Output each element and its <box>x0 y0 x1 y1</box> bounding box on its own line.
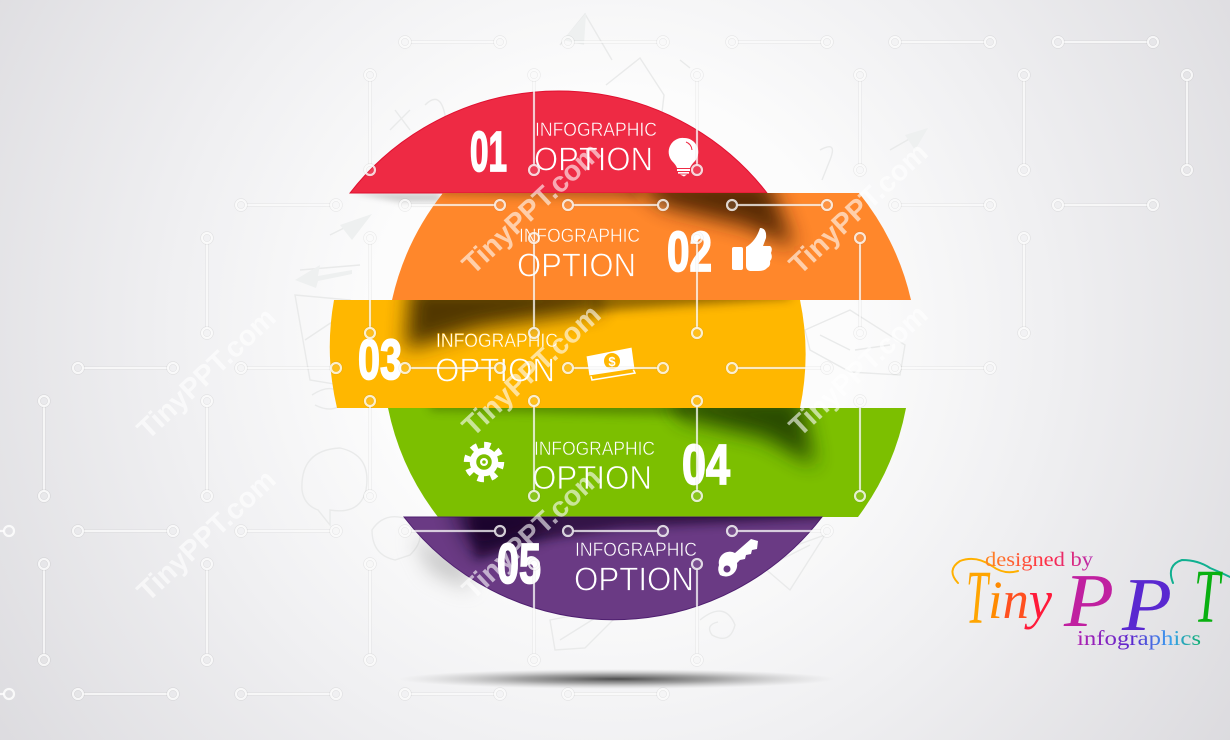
watermarks: TinyPPT.com <box>783 137 934 281</box>
watermarks: TinyPPT.com <box>131 464 282 608</box>
number 01: 01 <box>470 120 507 184</box>
panel: band 02 orange <box>392 193 911 300</box>
heading 04 <box>532 438 655 496</box>
number 04: 04 <box>682 433 730 497</box>
logo swashes <box>952 559 1230 583</box>
heading 01: OPTION <box>534 140 653 178</box>
panel: band 03 yellow <box>330 300 806 408</box>
shadow on purple band <box>443 517 822 566</box>
shadow on green band <box>430 395 815 466</box>
watermarks: TinyPPT.com <box>783 299 934 443</box>
icon: banknotes: $ <box>608 354 616 369</box>
icon: banknotes <box>586 347 635 380</box>
watermarks: TinyPPT.com <box>456 137 607 281</box>
icon: light bulb <box>669 138 698 176</box>
panel: band 05 purple <box>403 516 823 620</box>
logo: designed by TinyPPT infographics: designed by <box>985 549 1093 571</box>
panel: band 04 green <box>388 408 906 517</box>
heading 05 <box>574 539 697 598</box>
logo: designed by TinyPPT infographics: infographics <box>1077 626 1201 650</box>
number 02: 02 <box>667 220 712 284</box>
faint hand-drawn doodles <box>295 14 925 650</box>
logo: designed by TinyPPT infographics <box>952 549 1230 650</box>
icon: gear <box>467 445 501 479</box>
logo: designed by TinyPPT infographics: T <box>966 556 990 640</box>
heading 01 <box>534 119 657 178</box>
heading 03: OPTION <box>435 352 555 388</box>
heading 03: INFOGRAPHIC <box>436 330 558 352</box>
drop shadow under red band <box>352 193 440 202</box>
doodle arrows <box>295 13 928 288</box>
heading 02 <box>517 225 640 284</box>
number 05: 05 <box>497 532 541 596</box>
heading 03 <box>435 330 558 388</box>
ground shadow <box>399 669 835 689</box>
watermarks: TinyPPT.com <box>456 299 607 443</box>
icon: thumbs up <box>732 228 772 271</box>
number 03: 03 <box>358 328 402 392</box>
watermarks <box>131 137 934 608</box>
shadow on yellow band <box>405 285 790 350</box>
heading 01: INFOGRAPHIC <box>535 119 657 141</box>
heading 05: OPTION <box>574 560 694 598</box>
heading 05: INFOGRAPHIC <box>575 539 697 561</box>
logo: designed by TinyPPT infographics: iny <box>988 570 1052 630</box>
heading 02: OPTION <box>517 246 636 284</box>
logo: designed by TinyPPT infographics: P <box>1121 563 1172 647</box>
shadow on orange band <box>440 178 795 248</box>
watermarks: TinyPPT.com <box>131 302 282 446</box>
heading 02: INFOGRAPHIC <box>519 225 640 247</box>
icon: key <box>718 539 758 576</box>
watermarks: TinyPPT.com <box>456 462 607 606</box>
heading 04: INFOGRAPHIC <box>534 438 655 460</box>
heading 04: OPTION <box>532 459 652 496</box>
panel: band 01 red <box>350 91 767 193</box>
drop shadow under purple band <box>412 535 470 590</box>
logo: designed by TinyPPT infographics: P <box>1063 559 1114 643</box>
